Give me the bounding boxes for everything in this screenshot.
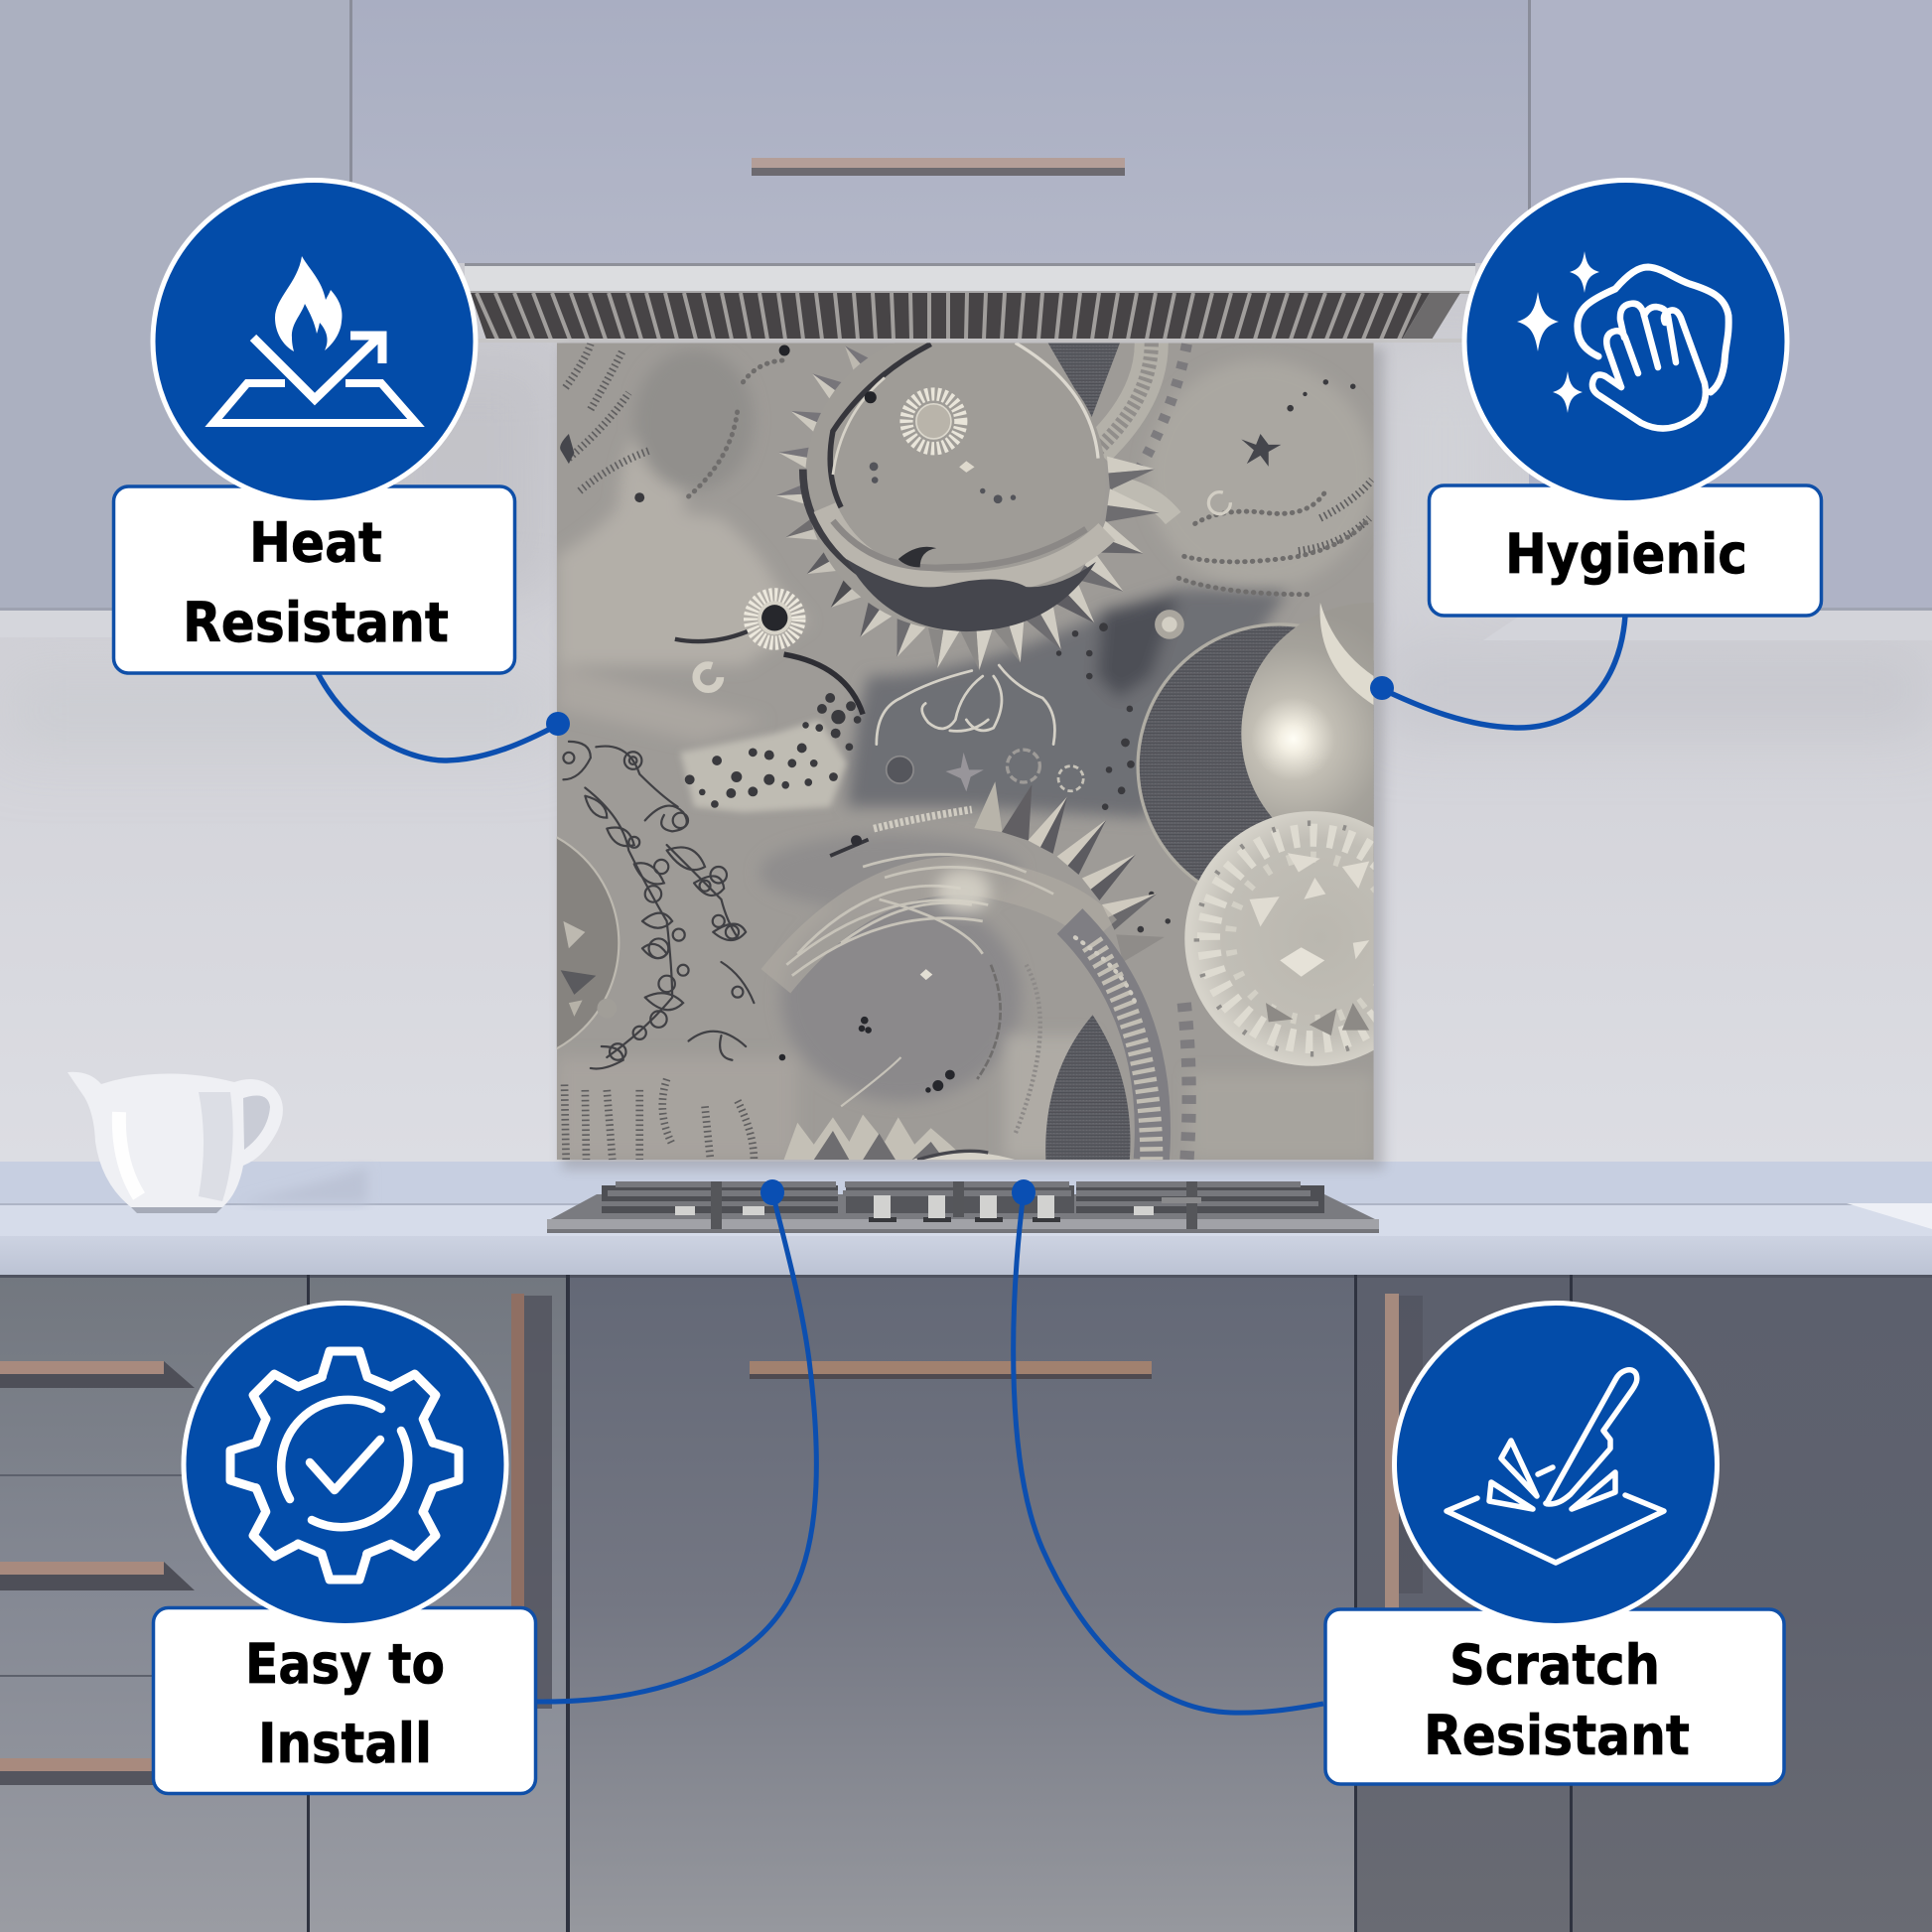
dark squiggle vines [563, 742, 754, 1069]
vine dot chains [689, 360, 1369, 595]
cabinet handles [0, 1294, 1423, 1785]
lower sunburst arc [775, 779, 1168, 981]
left partial sphere [556, 836, 620, 1050]
icon: knife scratching surface [1447, 1370, 1664, 1563]
icon: flame over surface [213, 256, 416, 423]
label box: Resistant [183, 591, 449, 654]
countertop [0, 1162, 1932, 1275]
label box: Install [258, 1712, 432, 1775]
badge circle [1394, 1303, 1718, 1626]
wall shadow bands [0, 357, 1932, 755]
pearl sphere [1241, 624, 1374, 827]
large pale leaf sphere [1184, 811, 1374, 1066]
badge circle [184, 1303, 506, 1626]
connector line [537, 1179, 816, 1702]
connector line [1012, 1179, 1323, 1713]
label box: Heat [249, 510, 382, 574]
bead chain and tiny florets [779, 965, 1040, 1134]
top right textured wedge [1048, 343, 1120, 418]
white flower medallion [906, 394, 961, 449]
label box [1430, 485, 1821, 616]
black eye medallion [675, 595, 863, 714]
jellyfish line art [877, 665, 1054, 745]
spiral [696, 665, 720, 689]
range hood [465, 263, 1475, 343]
label box [113, 486, 514, 673]
lower chevron band [1070, 921, 1189, 1160]
label box: Scratch [1449, 1633, 1660, 1697]
panel shadow [562, 347, 1384, 1170]
badge circle [1464, 181, 1787, 502]
label box [153, 1608, 536, 1793]
upper cabinets [0, 0, 1932, 640]
callout: heat resistant [113, 181, 570, 760]
panel edge highlights [1374, 343, 1375, 1160]
printed splashback panel [556, 343, 1374, 1160]
pitcher [68, 1072, 367, 1213]
sunburst spikes around upper sphere [775, 335, 1162, 671]
lower cabinets [0, 1275, 1932, 1932]
connector line [315, 667, 570, 760]
label box [1325, 1609, 1784, 1784]
hatched chain rows [565, 344, 1372, 1160]
callout: scratch resistant [1012, 1179, 1784, 1784]
upper cabinet handle [752, 158, 1125, 176]
crescent moon [1320, 603, 1374, 705]
label box: Easy to [245, 1632, 445, 1696]
chevron band upper [1097, 343, 1186, 518]
icon: gear with check [230, 1351, 459, 1580]
label box: Hygienic [1505, 522, 1747, 586]
callout: hygienic [1370, 181, 1821, 728]
dark textured disc [1136, 622, 1374, 884]
callout: easy to install [153, 1179, 816, 1793]
lower textured lens [1045, 1015, 1130, 1160]
badge circle [153, 181, 476, 502]
label box: Resistant [1424, 1704, 1690, 1767]
right top flower and spiral [560, 434, 1281, 514]
bottom spikes [784, 1057, 1016, 1160]
cooktop [547, 1181, 1379, 1233]
icon: hand wiping with sparkles [1517, 251, 1728, 429]
connector line [1370, 616, 1625, 728]
small centre ornaments [887, 610, 1184, 791]
polka dot patch [680, 379, 1355, 954]
soft tonal blobs [557, 349, 1375, 1160]
upper sphere [779, 330, 1107, 631]
